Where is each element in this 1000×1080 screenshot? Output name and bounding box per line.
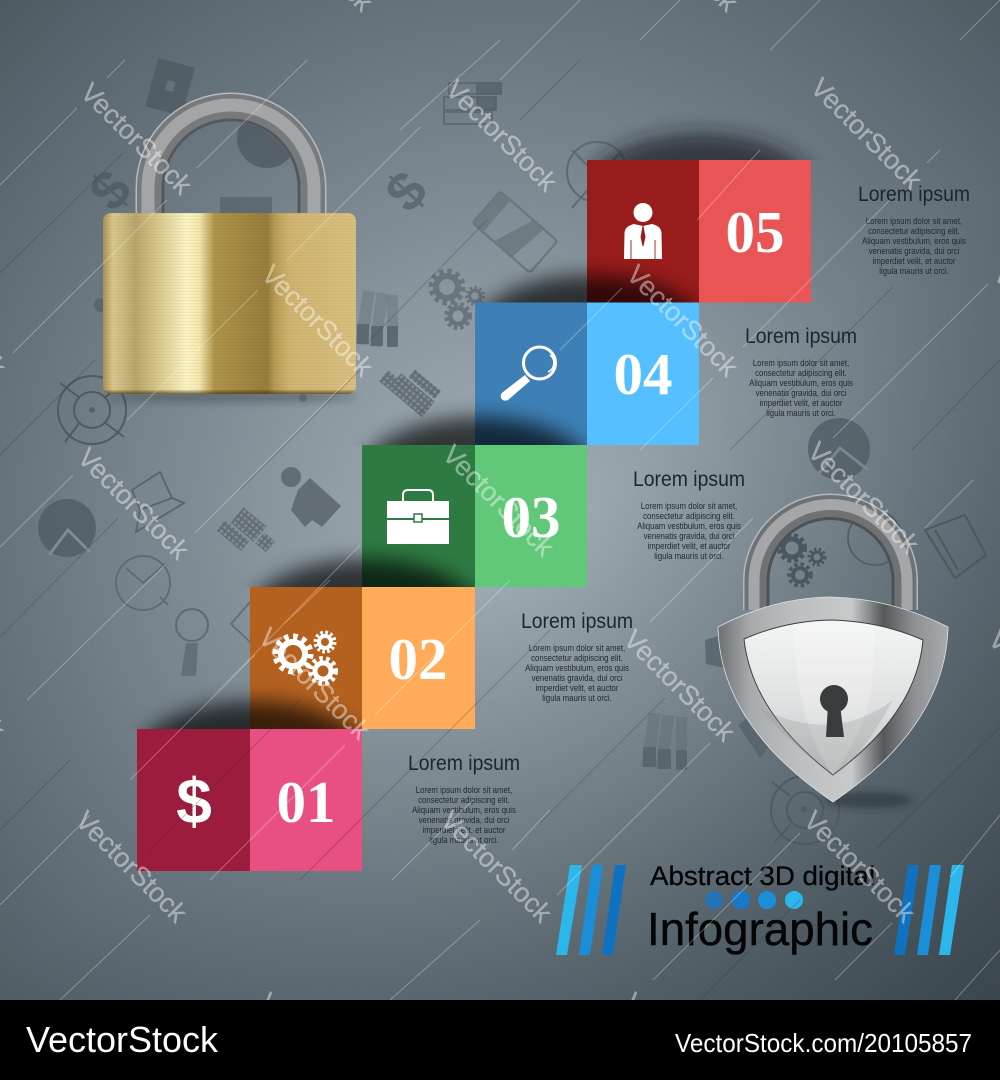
text block 04: venenatis gravida, dui orci: [756, 387, 847, 398]
icon: dollar: $: [176, 765, 212, 837]
text block 01: consectetur adipiscing elit.: [418, 794, 510, 805]
shield shadow: [823, 792, 913, 808]
icon: magnifier: [176, 609, 208, 676]
text block 01: Aliquam vestibulum, eros quis: [412, 804, 516, 815]
text block 03: Aliquam vestibulum, eros quis: [637, 520, 741, 531]
step 05 dark panel: [587, 160, 699, 302]
icon: person: [281, 467, 341, 527]
shadow above step 02: [247, 545, 475, 587]
watermark text: VectorStock: [437, 439, 560, 563]
shadow above step 04: [474, 262, 699, 302]
text block 02: Lorem ipsum: [521, 610, 633, 633]
step 03 number panel: [475, 445, 587, 587]
text block 04: Lorem ipsum dolor sit amet,: [753, 357, 849, 368]
footer image id: VectorStock.com/20105857: [675, 1028, 972, 1058]
text block 04: imperdiet velit, et auctor: [760, 397, 843, 408]
shield frame: [718, 597, 948, 802]
text block 03: Lorem ipsum dolor sit amet,: [641, 500, 737, 511]
text block 01: venenatis gravida, dui orci: [419, 814, 510, 825]
icon: gears centre: [431, 271, 484, 328]
step 03 number panel: 03: [502, 484, 560, 550]
icon: binders lower: [641, 712, 687, 770]
step 04 number panel: [587, 302, 699, 445]
icon: dollar left: $: [77, 158, 143, 222]
text block 02: ligula mauris ut orci.: [542, 692, 612, 703]
icon: binder behind shield: [738, 715, 770, 758]
watermark text: VectorStock: [72, 442, 195, 566]
step 01 dark panel: [137, 729, 250, 871]
text block 05: ligula mauris ut orci.: [879, 265, 949, 276]
icon: businessman: [624, 203, 662, 259]
four dots: [705, 891, 803, 909]
shadow above step 05: [584, 120, 815, 160]
step 05 number panel: [699, 160, 811, 302]
watermark text: VectorStock: [805, 72, 928, 196]
text block 05: venenatis gravida, dui orci: [869, 245, 960, 256]
icon: gears: [276, 632, 336, 684]
icon: gear under gold lock: [299, 394, 307, 402]
icon: binders behind gold lock: [220, 197, 272, 213]
icon: clock: [116, 556, 170, 610]
icon: gears behind silver shackle: [779, 535, 825, 586]
watermark text: VectorStock: [75, 77, 198, 201]
text block 04: [745, 325, 857, 418]
icon: laptop left: [132, 472, 184, 532]
text block 03: Lorem ipsum: [633, 468, 745, 491]
text block 02: Lorem ipsum dolor sit amet,: [529, 642, 625, 653]
text block 02: [521, 610, 633, 703]
step 05 number panel: 05: [726, 199, 784, 265]
step 02 number panel: [362, 587, 475, 729]
title block: [556, 861, 964, 955]
text block 04: Aliquam vestibulum, eros quis: [749, 377, 853, 388]
shadow above step 01: [136, 687, 362, 729]
title line 2: Infographic: [647, 903, 873, 955]
icon: magnifier: [501, 347, 556, 401]
icon: keyboard centre: [379, 357, 443, 417]
icon: keyboard behind shield: [880, 740, 910, 775]
watermark text: VectorStock: [618, 624, 741, 748]
text block 03: imperdiet velit, et auctor: [648, 540, 731, 551]
text block 03: venenatis gravida, dui orci: [644, 530, 735, 541]
gold padlock: [103, 105, 357, 402]
watermark text: VectorStock: [435, 805, 558, 929]
silver shield padlock: [718, 504, 948, 808]
silver shackle: [754, 504, 907, 610]
icon: dollar centre: $: [373, 159, 439, 223]
watermark text: VectorStock: [253, 622, 376, 746]
icon: gear left of gold lock: [94, 298, 108, 312]
text block 04: Lorem ipsum: [745, 325, 857, 348]
text block 03: ligula mauris ut orci.: [654, 550, 724, 561]
step 02 dark panel: [250, 587, 362, 729]
text block 05: Aliquam vestibulum, eros quis: [862, 235, 966, 246]
steps: [135, 133, 818, 871]
text block 04: consectetur adipiscing elit.: [755, 367, 847, 378]
watermark text: VectorStock: [798, 805, 921, 929]
icon: briefcase top left: [145, 58, 195, 116]
left stripes: [556, 865, 626, 955]
text block 05: Lorem ipsum: [858, 183, 970, 206]
icon: target left: [58, 376, 126, 444]
title line 1: Abstract 3D digital: [650, 861, 875, 891]
text block 05: consectetur adipiscing elit.: [868, 225, 960, 236]
step 04 number panel: 04: [614, 341, 672, 407]
right stripes: [894, 865, 964, 955]
text block 01: [408, 752, 520, 845]
watermark text: VectorStock: [802, 436, 925, 560]
text block 05: [858, 183, 970, 276]
text block 02: venenatis gravida, dui orci: [532, 672, 623, 683]
icon: binders right of gold lock: [355, 290, 398, 348]
text block 01: ligula mauris ut orci.: [429, 834, 499, 845]
keyhole: [820, 685, 848, 737]
text block 05: imperdiet velit, et auctor: [873, 255, 956, 266]
text block 02: imperdiet velit, et auctor: [536, 682, 619, 693]
icon: tablet corner under step 02: [231, 602, 250, 642]
step 03 dark panel: [362, 445, 475, 587]
icon: clock right: [848, 511, 902, 565]
shadow above step 03: [360, 402, 587, 445]
icon: target lower right: [771, 776, 839, 844]
text block 05: Lorem ipsum dolor sit amet,: [866, 215, 962, 226]
icon: tablet: [473, 191, 557, 273]
step 01 number panel: [250, 729, 362, 871]
step 02 number panel: 02: [388, 626, 448, 692]
text block 01: Lorem ipsum dolor sit amet,: [416, 784, 512, 795]
watermark text: VectorStock: [256, 259, 379, 383]
step 04 dark panel: [475, 302, 587, 445]
step 01 number panel: 01: [276, 769, 336, 835]
icon: target behind step 05: [567, 142, 627, 208]
gold padlock body: [103, 213, 356, 394]
footer logo: VectorStock: [26, 1019, 219, 1060]
text block 03: consectetur adipiscing elit.: [643, 510, 735, 521]
icon: gear left of silver lock: [705, 635, 725, 668]
watermark text: VectorStock: [621, 259, 744, 383]
icon: laptop right: [925, 515, 986, 578]
icon: pie left: [38, 499, 96, 557]
gold padlock shackle: [148, 105, 314, 216]
background icons: [38, 58, 986, 844]
icon: pie right: [808, 418, 870, 480]
icon: binders top: [444, 83, 501, 124]
icon: pie behind gold shackle: [237, 108, 297, 168]
footer bar: [0, 1000, 1000, 1080]
shield glass: [744, 620, 923, 775]
watermark text: VectorStock: [70, 805, 193, 929]
icon: briefcase: [387, 490, 449, 544]
text block 02: Aliquam vestibulum, eros quis: [525, 662, 629, 673]
text block 01: Lorem ipsum: [408, 752, 520, 775]
text block 01: imperdiet velit, et auctor: [423, 824, 506, 835]
icon: keyboard lower left: [217, 504, 279, 564]
watermark text: VectorStock: [440, 74, 563, 198]
text block 03: [633, 468, 745, 561]
text block 02: consectetur adipiscing elit.: [531, 652, 623, 663]
text block 04: ligula mauris ut orci.: [766, 407, 836, 418]
padlock shadow: [107, 392, 357, 402]
